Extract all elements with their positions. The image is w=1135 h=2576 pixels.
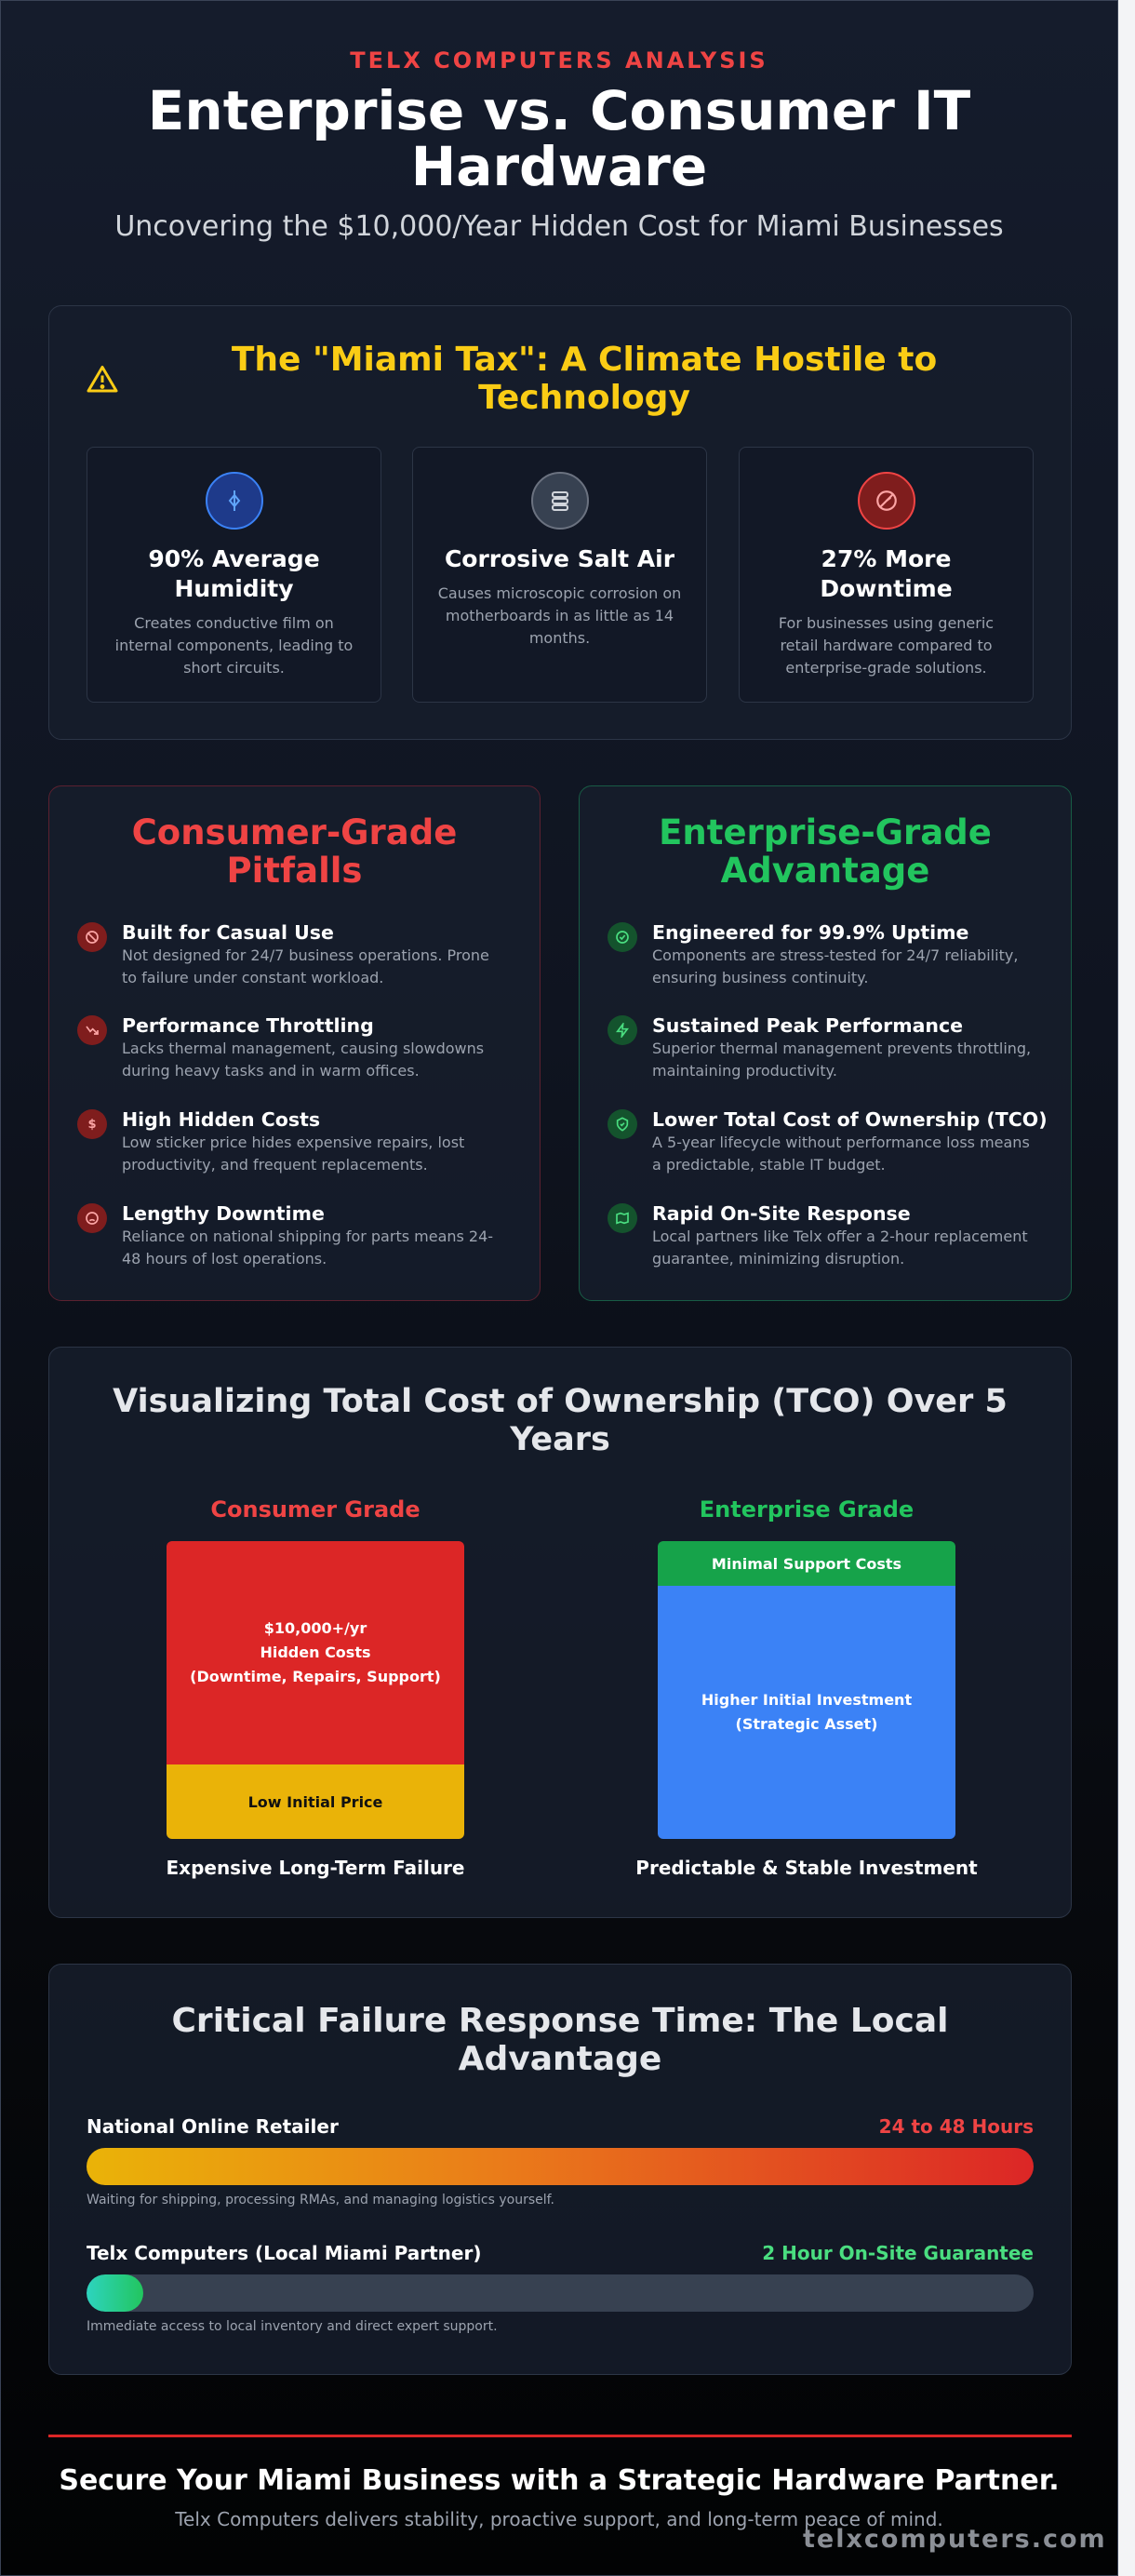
CTA sub: Telx Computers delivers stability, proactive support, and long-term peace of mind. (175, 2508, 943, 2530)
CTA headline: Secure Your Miami Business with a Strategic Hardware Partner. (59, 2464, 1060, 2497)
subtitle: Uncovering the $10,000/Year Hidden Cost for Miami Businesses (114, 210, 1004, 243)
item: Performance Throttling (122, 1014, 374, 1037)
item: Components are stress-tested for 24/7 reliability, ensuring business continuity. (652, 946, 1018, 986)
item: Built for Casual Use (122, 921, 334, 944)
item (77, 921, 489, 986)
item (608, 1014, 1031, 1080)
bar: consumer stack (167, 1541, 464, 1839)
card: humidity: Creates conductive film on internal components, leading to short circuits. (115, 614, 353, 677)
bar: consumer stack: (Downtime, Repairs, Support) (190, 1668, 441, 1685)
bar: consumer stack: Hidden Costs (260, 1644, 370, 1661)
bar: enterprise stack: Minimal Support Costs (712, 1554, 901, 1573)
card: salt air (412, 447, 707, 703)
item (608, 1108, 1048, 1174)
item (77, 1202, 493, 1268)
icon: warning (87, 365, 118, 393)
panel: miami tax (48, 305, 1072, 740)
card: humidity: 90% Average Humidity (148, 545, 320, 602)
item: Superior thermal management prevents throttling, maintaining productivity. (652, 1040, 1031, 1080)
card: downtime: 27% More Downtime (820, 545, 953, 602)
bar: national (87, 2148, 1034, 2185)
item: Lower Total Cost of Ownership (TCO) (652, 1108, 1048, 1131)
note: Waiting for shipping, processing RMAs, and managing logistics yourself. (87, 2193, 554, 2207)
card: humidity (87, 447, 381, 703)
card: downtime: For businesses using generic retail hardware compared to enterprise-grade solutions. (779, 614, 994, 677)
card: salt air: Causes microscopic corrosion on motherboards in as little as 14 months. (438, 584, 681, 647)
label row: national: National Online Retailer (87, 2115, 339, 2138)
label row: national: 24 to 48 Hours (879, 2115, 1034, 2138)
item: High Hidden Costs (122, 1108, 320, 1131)
bar: enterprise stack (658, 1541, 955, 1839)
item: Not designed for 24/7 business operations. Prone to failure under constant workload. (122, 946, 489, 986)
card: salt air: Corrosive Salt Air (445, 545, 674, 572)
heading: The "Miami Tax": A Climate Hostile to Technology (232, 341, 937, 417)
divider (48, 2435, 1072, 2437)
item: Local partners like Telx offer a 2-hour replacement guarantee, minimizing disruption. (652, 1228, 1028, 1268)
bar: consumer stack: $10,000+/yr (264, 1619, 367, 1637)
note: Immediate access to local inventory and direct expert support. (87, 2319, 498, 2334)
item: $ (87, 1117, 97, 1132)
heading: Visualizing Total Cost of Ownership (TCO) Over 5 Years (113, 1383, 1008, 1458)
heading: Critical Failure Response Time: The Local Advantage (172, 2002, 948, 2078)
icon: gauge off (858, 472, 915, 530)
label: enterprise: Enterprise Grade (700, 1496, 914, 1523)
caption: enterprise: Predictable & Stable Investment (635, 1857, 978, 1879)
heading: Enterprise-Grade Advantage (659, 812, 992, 891)
item: Sustained Peak Performance (652, 1014, 963, 1037)
label: consumer: Consumer Grade (210, 1496, 421, 1523)
panel: TCO chart (48, 1347, 1072, 1918)
panel: enterprise advantage (579, 785, 1072, 1301)
label row: national (87, 2115, 1034, 2138)
item (77, 1108, 464, 1174)
item (608, 1202, 1028, 1268)
panel: consumer pitfalls (48, 785, 541, 1301)
eyebrow: TELX COMPUTERS ANALYSIS (350, 47, 768, 74)
label row: telx: 2 Hour On-Site Guarantee (762, 2242, 1034, 2264)
item: Lengthy Downtime (122, 1202, 325, 1225)
item (77, 1014, 484, 1080)
watermark: telxcomputers.com (803, 2525, 1107, 2554)
icon: drop (205, 472, 262, 530)
item: Engineered for 99.9% Uptime (652, 921, 968, 944)
card: downtime (739, 447, 1034, 703)
heading: Consumer-Grade Pitfalls (132, 812, 457, 891)
item: A 5-year lifecycle without performance loss means a predictable, stable IT budget. (652, 1134, 1030, 1174)
label row: telx: Telx Computers (Local Miami Partner) (87, 2242, 482, 2264)
bar: consumer stack: Low Initial Price (248, 1792, 382, 1811)
bar: enterprise stack: Higher Initial Investment (701, 1691, 912, 1709)
title: Enterprise vs. Consumer IT Hardware (148, 79, 970, 198)
bar: telx (87, 2274, 1034, 2312)
icon: layers (530, 472, 588, 530)
item: Low sticker price hides expensive repairs, lost productivity, and frequent replacements. (122, 1134, 464, 1174)
bar: enterprise stack: (Strategic Asset) (736, 1715, 877, 1733)
panel: response time (48, 1964, 1072, 2375)
item: Reliance on national shipping for parts means 24-48 hours of lost operations. (122, 1228, 493, 1268)
caption: consumer: Expensive Long-Term Failure (166, 1857, 465, 1879)
item: Lacks thermal management, causing slowdowns during heavy tasks and in warm offices. (122, 1040, 484, 1080)
label row: telx (87, 2242, 1034, 2264)
item: Rapid On-Site Response (652, 1202, 911, 1225)
item (608, 921, 1018, 986)
